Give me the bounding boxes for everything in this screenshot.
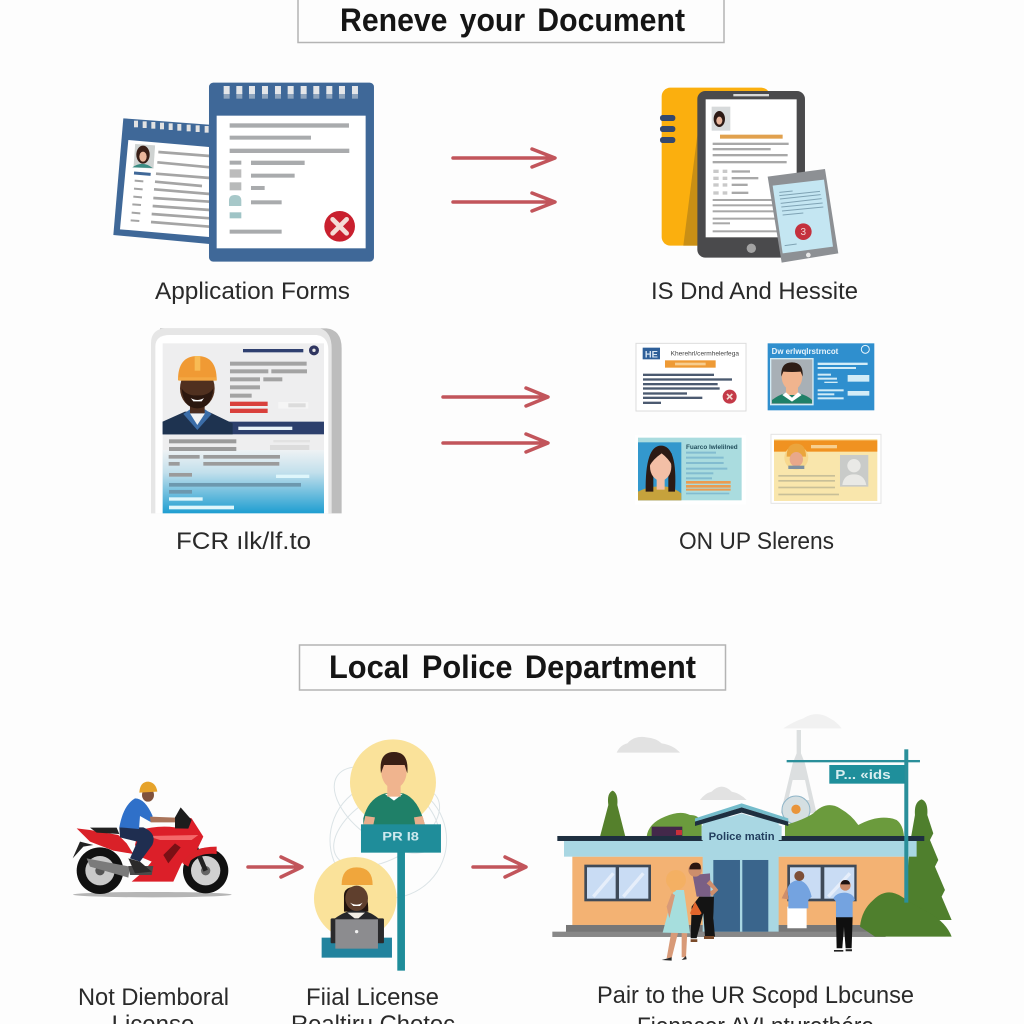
heading: Local Police Department: Local Police Department bbox=[329, 649, 696, 685]
sign text: PR I8 bbox=[382, 831, 420, 844]
icon: tablet and binder: 3 bbox=[801, 227, 807, 238]
card: teal ID bbox=[635, 435, 746, 504]
icon: worker ID card bbox=[151, 328, 342, 513]
heading: Reneve your Document: Reneve your Document bbox=[340, 2, 685, 38]
label: Pair to the UR Scopd Lbcunse bbox=[597, 982, 914, 1024]
card: white document bbox=[636, 343, 746, 411]
card: teal ID: Fuarco Iwlelilned bbox=[686, 444, 738, 451]
illustration: police station bbox=[552, 714, 952, 961]
label: application forms: Application Forms bbox=[155, 278, 350, 305]
card: white document: HE bbox=[645, 349, 658, 359]
card: yellow ID bbox=[771, 434, 881, 503]
arrow: row one upper bbox=[453, 149, 555, 167]
icon: officers and sign bbox=[314, 739, 454, 971]
person: at window bbox=[782, 871, 812, 928]
icon: tablet and binder bbox=[660, 88, 838, 263]
icon: four ID cards bbox=[635, 343, 881, 504]
person: man with bag bbox=[688, 863, 718, 942]
label: IS Dnd And Hessite: IS Dnd And Hessite bbox=[651, 278, 858, 305]
label: ON UP Slerens: ON UP Slerens bbox=[679, 528, 834, 555]
card: white document: Kherehrl/cermhelerfega bbox=[671, 351, 739, 358]
sign: Police matin: Police matin bbox=[709, 831, 775, 843]
label: Not Diemboral License: Not Diemboral bbox=[78, 984, 229, 1011]
card: blue ID bbox=[768, 343, 874, 410]
arrow: to officers bbox=[248, 857, 302, 877]
sign: P...: P... «ids bbox=[835, 768, 891, 782]
label: Not Diemboral License bbox=[78, 984, 229, 1024]
arrow: row two upper bbox=[443, 388, 548, 406]
card: blue ID: Dw erlwqlrstrncot bbox=[772, 346, 839, 356]
label: Pair to the UR Scopd Lbcunse: Pair to the UR Scopd Lbcunse bbox=[597, 982, 914, 1009]
label: Fiial License: Fiial License bbox=[306, 984, 439, 1011]
arrow: to police station bbox=[473, 857, 526, 877]
person: woman in dress bbox=[662, 870, 690, 961]
person: standing in blue bbox=[833, 880, 855, 952]
arrow: row two lower bbox=[443, 434, 548, 452]
label: FCR: FCR ılk/lf.to bbox=[176, 528, 311, 555]
icon: motorcycle rider bbox=[73, 782, 232, 897]
label: Fiial License bbox=[291, 984, 455, 1024]
arrow: row one lower bbox=[453, 193, 555, 211]
icon: application forms bbox=[113, 83, 374, 262]
